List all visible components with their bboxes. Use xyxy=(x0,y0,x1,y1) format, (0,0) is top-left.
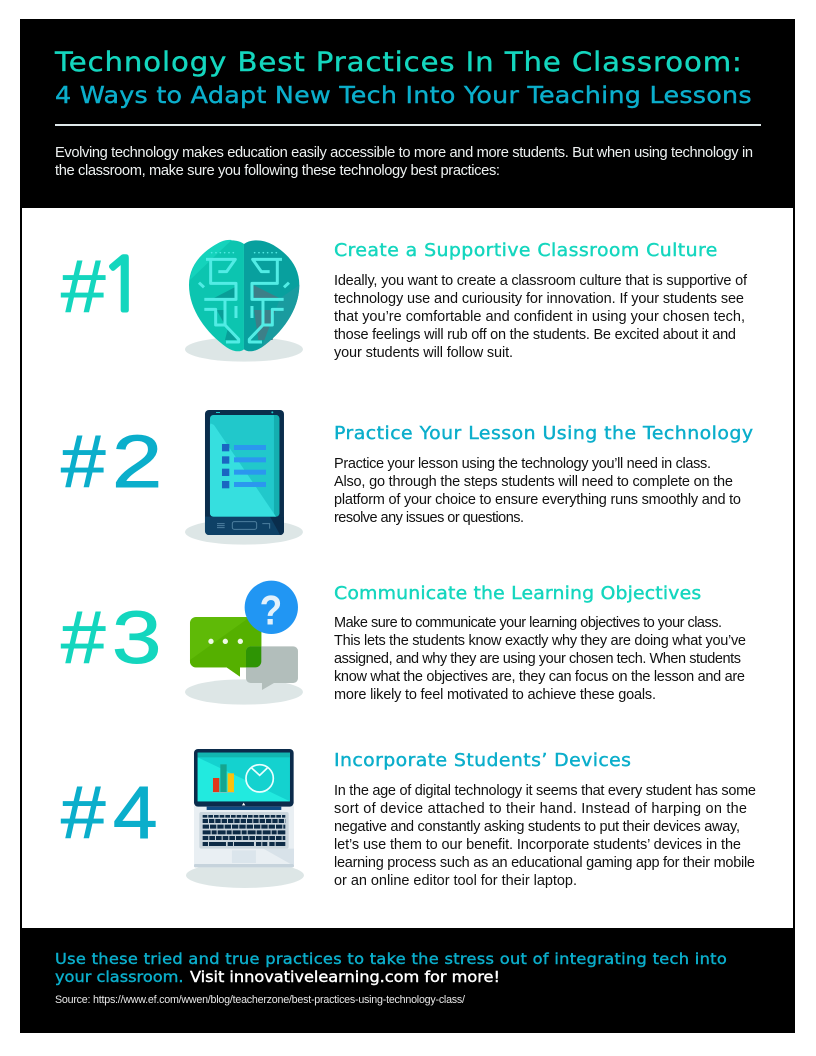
call to action: Visit innovativelearning.com for more! xyxy=(190,969,500,986)
body text 3: know what the objectives are, they can focus on the lesson and are xyxy=(334,669,745,685)
body text 1 xyxy=(334,273,748,361)
body text 1: that you’re comfortable and confident in using your chosen tech, xyxy=(334,309,745,325)
title xyxy=(54,46,752,109)
body text 3 xyxy=(334,615,746,703)
body text 2: platform of your choice to ensure everything runs smoothly and to xyxy=(334,492,741,508)
number 4 xyxy=(61,772,157,854)
number 2: # xyxy=(61,421,106,503)
body text 2: Also, go through the steps students will need to complete on the xyxy=(334,474,733,490)
number 3 xyxy=(61,597,161,679)
number 3: 3 xyxy=(112,597,161,679)
body text 3: more likely to feel motivated to achieve these goals. xyxy=(334,687,656,703)
body text 4: negative and constantly asking students to put their devices away, xyxy=(334,819,740,835)
body text 3: assigned, and why they are using your chosen tech. When students xyxy=(334,651,741,667)
body text 1: technology use and curiousity for innovation. If your students see xyxy=(334,291,744,307)
panel: header xyxy=(20,19,795,208)
call to action: your classroom. xyxy=(55,969,184,986)
body text 3: Make sure to communicate your learning objectives to your class. xyxy=(334,615,722,631)
call to action: Use these tried and true practices to take the stress out of integrating tech into xyxy=(55,951,727,968)
body text 4: learning process such as an educational gaming app for their mobile xyxy=(334,855,755,871)
source: Source: https://www.ef.com/wwen/blog/teacherzone/best-practices-using-technology-class/ xyxy=(55,994,465,1006)
number 1: # xyxy=(61,246,106,328)
number 1: 1 xyxy=(100,248,145,322)
intro text: Evolving technology makes education easily accessible to more and more students. But when using technology in xyxy=(55,145,753,161)
body text 1: those feelings will rub off on the students. Be excited about it and xyxy=(334,327,736,343)
body text 1: Ideally, you want to create a classroom culture that is supportive of xyxy=(334,273,748,289)
body text 4: sort of device attached to their hand. Instead of harping on the xyxy=(334,801,747,817)
body text 2: Practice your lesson using the technology you’ll need in class. xyxy=(334,456,711,472)
panel: practice 2 xyxy=(61,410,753,545)
body text 4 xyxy=(334,783,756,889)
number 4: # xyxy=(61,772,106,854)
intro text xyxy=(55,145,753,179)
body text 4: let’s use them to our benefit. Incorporate students’ devices in the xyxy=(334,837,741,853)
icon: chat bubbles: ? xyxy=(260,588,282,634)
body text 4: In the age of digital technology it seems that every student has some xyxy=(334,783,756,799)
heading 3: Communicate the Learning Objectives xyxy=(334,584,701,604)
call to action xyxy=(55,951,727,986)
number 3: # xyxy=(61,597,106,679)
panel: practice 1 xyxy=(61,240,748,362)
icon: laptop xyxy=(186,749,304,888)
heading 2: Practice Your Lesson Using the Technology xyxy=(334,424,753,444)
body text 2 xyxy=(334,456,741,526)
number 1 xyxy=(61,246,145,328)
panel: practice 4 xyxy=(61,749,756,889)
heading 4: Incorporate Students’ Devices xyxy=(334,751,631,771)
body text 3: This lets the students know exactly why they are doing what you’ve xyxy=(334,633,746,649)
icon: chat bubbles xyxy=(185,581,303,705)
intro text: the classroom, make sure you following these technology best practices: xyxy=(55,163,500,179)
icon: brain xyxy=(185,240,303,362)
panel: footer xyxy=(20,928,795,1033)
icon: tablet xyxy=(185,410,303,545)
heading 1: Create a Supportive Classroom Culture xyxy=(334,241,717,261)
number 2 xyxy=(61,421,162,503)
title: 4 Ways to Adapt New Tech Into Your Teaching Lessons xyxy=(55,81,752,109)
body text 4: or an online editor tool for their laptop. xyxy=(334,873,577,889)
body text 1: your students will follow suit. xyxy=(334,345,513,361)
title: Technology Best Practices In The Classroom: xyxy=(54,46,742,78)
body text 2: resolve any issues or questions. xyxy=(334,510,524,526)
number 2: 2 xyxy=(112,421,162,503)
panel: practice 3 xyxy=(61,581,746,705)
number 4: 4 xyxy=(113,772,157,854)
